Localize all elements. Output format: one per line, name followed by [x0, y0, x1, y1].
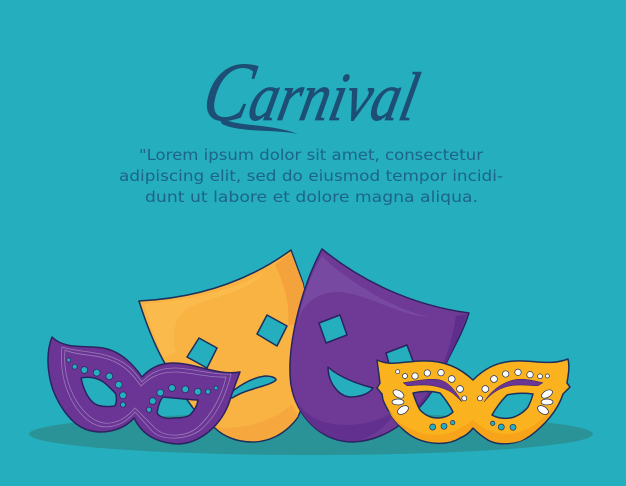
text block: lorem ipsum: adipiscing elit, sed do eiusmod tempor incidi- [119, 167, 503, 185]
icon: yellow eye mask [377, 359, 570, 444]
icon: purple theatre mask [290, 249, 469, 442]
icon: purple eye mask [48, 337, 240, 444]
icon: yellow theatre mask [139, 250, 312, 442]
ground shadow [29, 413, 593, 455]
title: Carnival: Carnival [195, 46, 428, 139]
text block: lorem ipsum: "Lorem ipsum dolor sit amet, consectetur [139, 146, 484, 164]
text block: lorem ipsum [119, 146, 503, 206]
text block: lorem ipsum: dunt ut labore et dolore magna aliqua. [145, 188, 478, 206]
